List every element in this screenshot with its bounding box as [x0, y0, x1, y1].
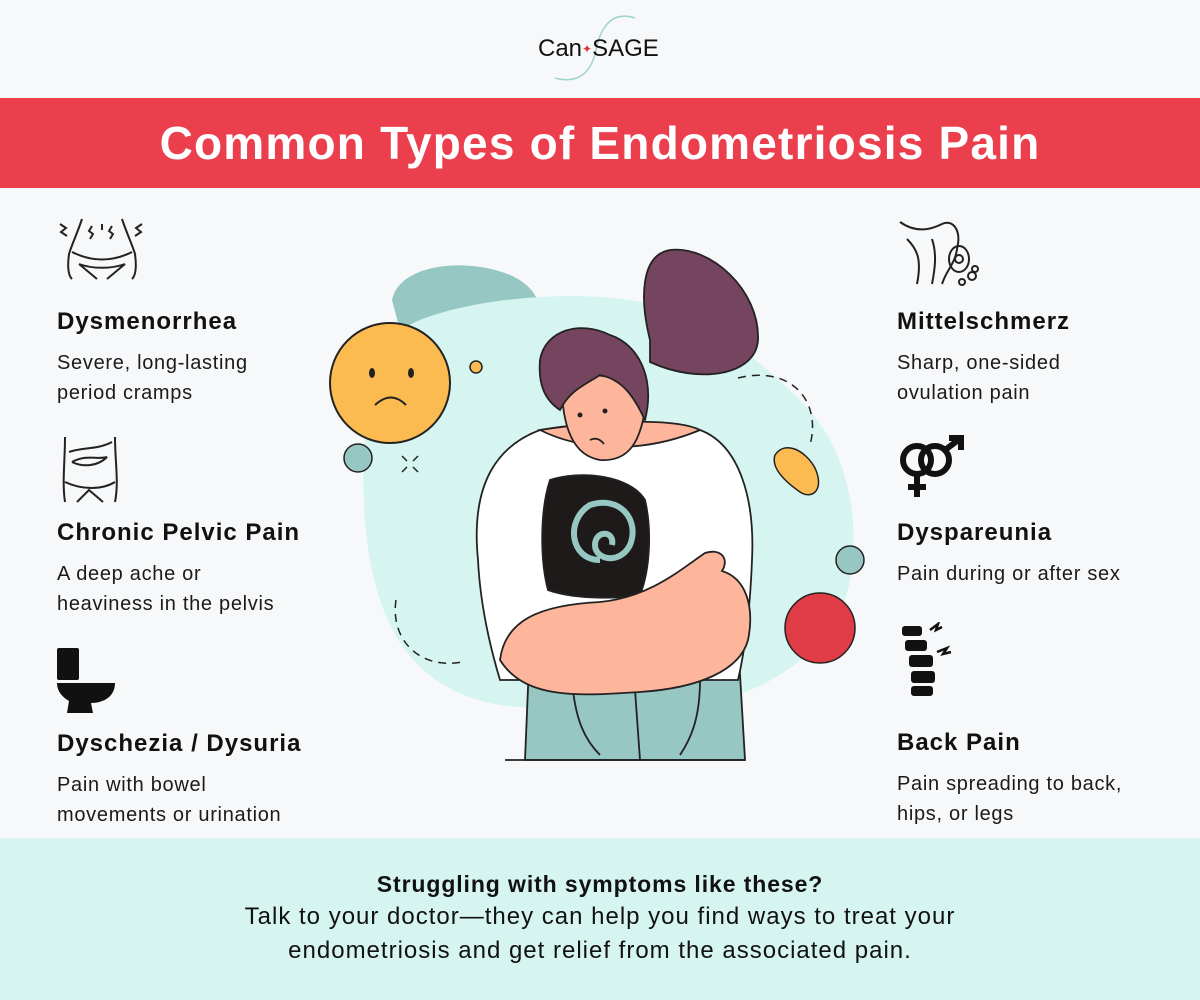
- title banner: [0, 98, 1200, 188]
- text: A deep ache or: [57, 563, 201, 585]
- background blobs: [363, 265, 853, 711]
- item: Dysmenorrhea: [57, 218, 248, 404]
- item: Dyschezia / Dysuria: [57, 648, 301, 826]
- item: Back Pain: [897, 622, 1122, 825]
- text: Dyschezia / Dysuria: [57, 730, 301, 757]
- text: movements or urination: [57, 804, 281, 826]
- text: Back Pain: [897, 729, 1021, 756]
- illustration: [329, 248, 865, 761]
- text: hips, or legs: [897, 803, 1014, 825]
- text: Sharp, one-sided: [897, 352, 1061, 374]
- icon: hands on pelvis: [62, 437, 118, 503]
- text: Dysmenorrhea: [57, 308, 237, 335]
- footer callout: [0, 838, 1200, 1000]
- title banner: Common Types of Endometriosis Pain: [160, 117, 1040, 169]
- text: Chronic Pelvic Pain: [57, 519, 300, 546]
- item: Mittelschmerz: [897, 221, 1070, 404]
- footer callout: endometriosis and get relief from the associated pain.: [288, 937, 912, 964]
- item: Dyspareunia: [897, 435, 1121, 585]
- text: Dyspareunia: [897, 519, 1052, 546]
- icon: pelvis cramps: [59, 218, 143, 280]
- text: ovulation pain: [897, 382, 1030, 404]
- text: Pain with bowel: [57, 774, 206, 796]
- icon: gender symbols: [900, 435, 964, 497]
- woman: [477, 250, 758, 760]
- text: Pain during or after sex: [897, 563, 1121, 585]
- icon: spine: [902, 622, 952, 696]
- decorations: [344, 361, 864, 663]
- item: Chronic Pelvic Pain: [57, 437, 300, 615]
- text: Severe, long-lasting: [57, 352, 248, 374]
- text: Pain spreading to back,: [897, 773, 1122, 795]
- logo: [538, 15, 659, 80]
- footer callout: Struggling with symptoms like these?: [377, 871, 823, 897]
- text: period cramps: [57, 382, 193, 404]
- icon: uterus ovary: [900, 221, 979, 286]
- icon: toilet: [57, 648, 115, 713]
- sad face: [330, 323, 450, 443]
- text: Mittelschmerz: [897, 308, 1070, 335]
- logo: Can✦SAGE: [538, 35, 659, 62]
- footer callout: Talk to your doctor—they can help you find ways to treat your: [245, 903, 955, 930]
- text: heaviness in the pelvis: [57, 593, 274, 615]
